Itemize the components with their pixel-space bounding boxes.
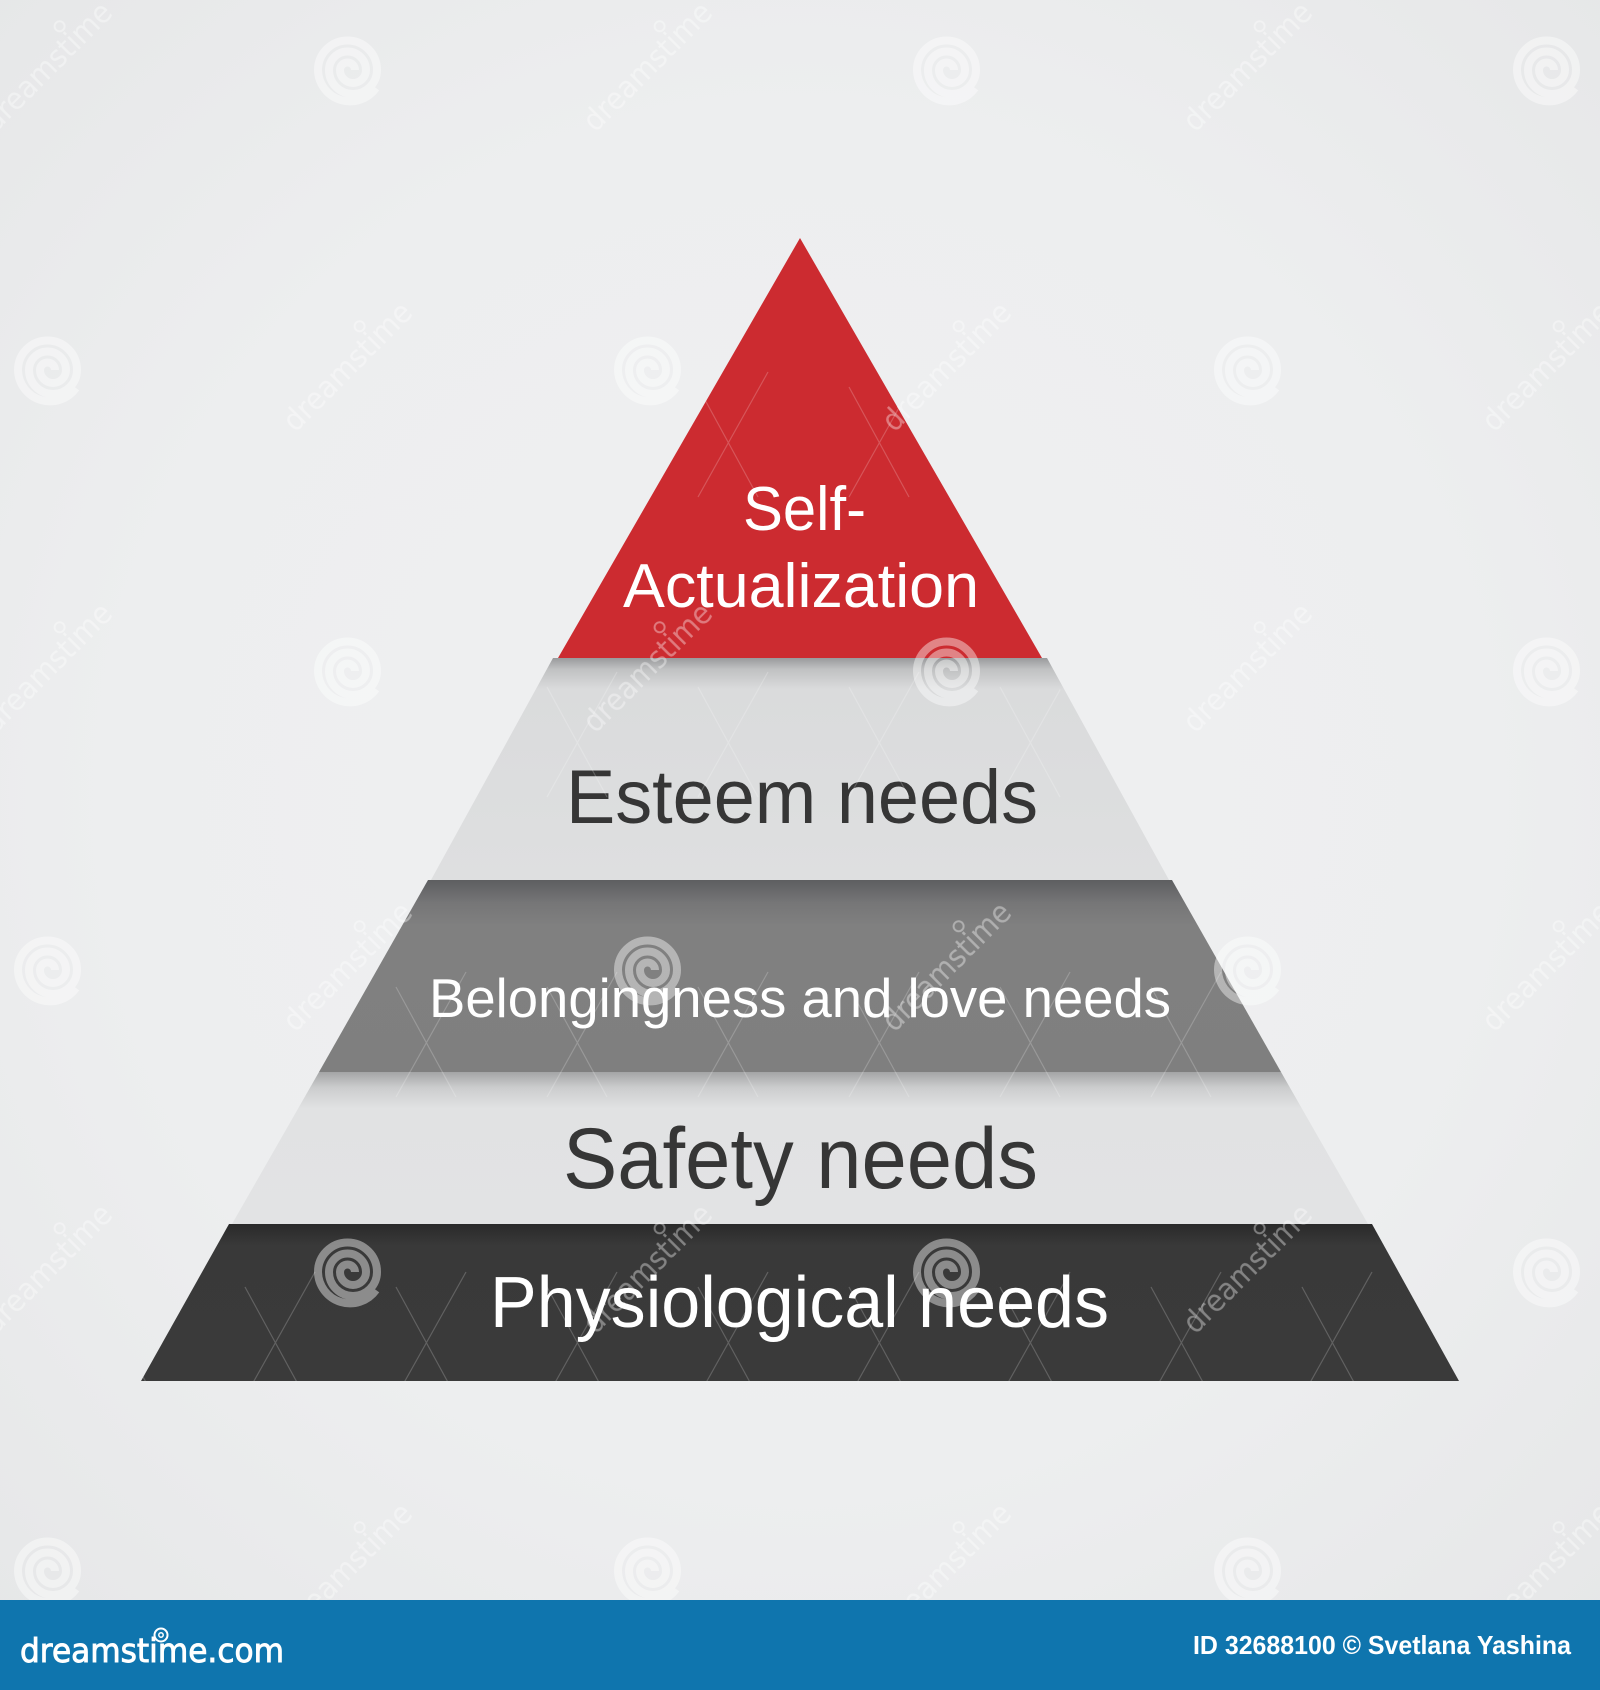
watermark diagonal wordmarks: dreamstime xyxy=(276,295,420,439)
watermark diagonal wordmarks: dreamstime xyxy=(1176,1197,1320,1341)
layer: esteem needs xyxy=(431,658,1169,880)
footer logo: dreamstime.com: dreamstime.com xyxy=(20,1631,284,1670)
watermark line pattern xyxy=(143,372,1372,1381)
watermark diagonal wordmarks: dreamstime xyxy=(576,596,720,740)
watermark diagonal wordmarks: dreamstime xyxy=(276,895,420,1039)
layer: belongingness and love needs: Belongingness and love needs xyxy=(429,967,1171,1029)
footer credit: ID 32688100 © Svetlana Yashina xyxy=(1193,1630,1572,1660)
layer: self-actualization xyxy=(558,238,1042,658)
layer: self-actualization: Actualization xyxy=(623,552,979,621)
watermark diagonal wordmarks: dreamstime xyxy=(576,1197,720,1341)
watermark diagonal wordmarks: dreamstime xyxy=(875,1496,1019,1640)
layer: physiological needs: Physiological needs xyxy=(490,1263,1109,1343)
watermark diagonal wordmarks: dreamstime xyxy=(875,295,1019,439)
layer: safety needs xyxy=(232,1072,1368,1224)
pyramid chart xyxy=(141,238,1459,1381)
layer: physiological needs xyxy=(141,1224,1459,1381)
layer: esteem needs: Esteem needs xyxy=(566,755,1038,840)
watermark diagonal wordmarks: dreamstime xyxy=(1176,596,1320,740)
watermark diagonal wordmarks: dreamstime xyxy=(875,895,1019,1039)
layer: belongingness and love needs xyxy=(319,880,1281,1072)
footer bar xyxy=(0,1600,1600,1690)
layer: self-actualization: Self- xyxy=(743,475,866,544)
watermark diagonal wordmarks: dreamstime xyxy=(276,1496,420,1640)
layer: safety needs: Safety needs xyxy=(563,1111,1038,1207)
